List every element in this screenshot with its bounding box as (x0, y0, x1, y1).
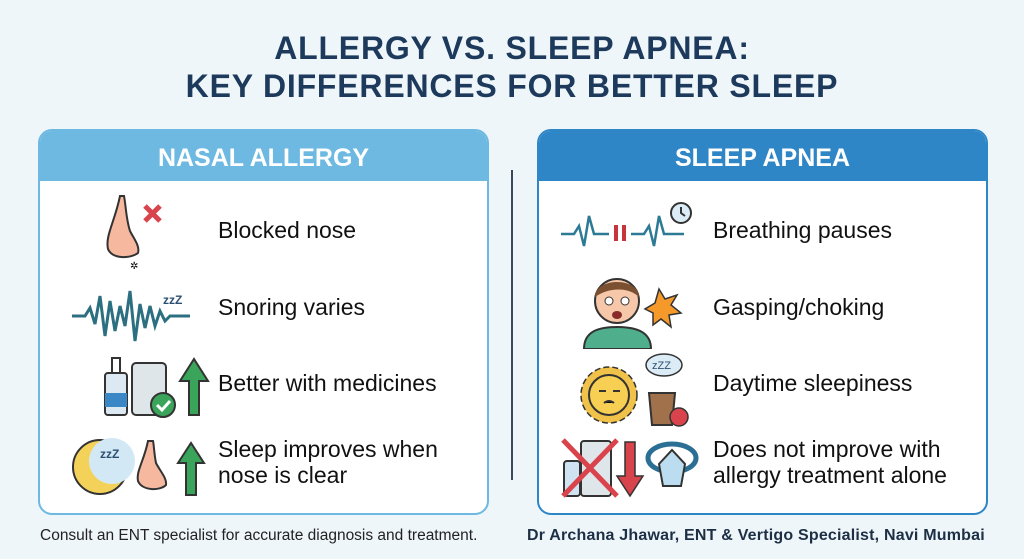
icon: daytime sleepiness (580, 353, 689, 427)
text: daytime sleepiness: Daytime sleepiness (713, 370, 912, 396)
text: does not improve (713, 436, 947, 488)
icon: no improvement, cpap mask (561, 438, 698, 498)
text: sleep improves (218, 436, 438, 488)
heading: nasal allergy (40, 131, 487, 181)
footer: doctor credit: Dr Archana Jhawar, ENT & Vertigo Specialist, Navi Mumbai (527, 527, 985, 544)
panel: sleep apnea (537, 129, 988, 515)
text: does not improve: allergy treatment alone (713, 462, 947, 488)
text: does not improve: Does not improve with (713, 436, 941, 462)
text: gasping/choking: Gasping/choking (713, 294, 884, 320)
heading: sleep apnea (539, 131, 986, 181)
icon: sleep and clear nose: zzZ (100, 447, 119, 461)
icon: snoring wave: zzZ (163, 293, 182, 307)
text: snoring varies: Snoring varies (218, 294, 365, 320)
heading: sleep apnea: SLEEP APNEA (675, 144, 850, 172)
icon: breathing pauses (561, 202, 692, 246)
footer: consult note: Consult an ENT specialist for accurate diagnosis and treatment. (40, 527, 477, 544)
text: sleep improves: Sleep improves when (218, 436, 438, 462)
text: blocked nose: Blocked nose (218, 217, 356, 243)
divider (511, 170, 513, 480)
title: KEY DIFFERENCES FOR BETTER SLEEP (186, 68, 838, 104)
icon: medicines (104, 357, 210, 418)
title (186, 30, 838, 104)
text: breathing pauses: Breathing pauses (713, 217, 892, 243)
heading: nasal allergy: NASAL ALLERGY (158, 144, 369, 172)
panel: nasal allergy (38, 129, 489, 515)
icon: snoring wave (72, 290, 190, 342)
title: ALLERGY VS. SLEEP APNEA: (274, 30, 750, 66)
text: sleep improves: nose is clear (218, 462, 347, 488)
text: better with medicines: Better with medicines (218, 370, 437, 396)
icon: daytime sleepiness: zZZ (652, 360, 671, 372)
icon: blocked nose (106, 195, 162, 271)
icon: sleep and clear nose (72, 438, 206, 496)
icon: gasping person (583, 278, 683, 349)
